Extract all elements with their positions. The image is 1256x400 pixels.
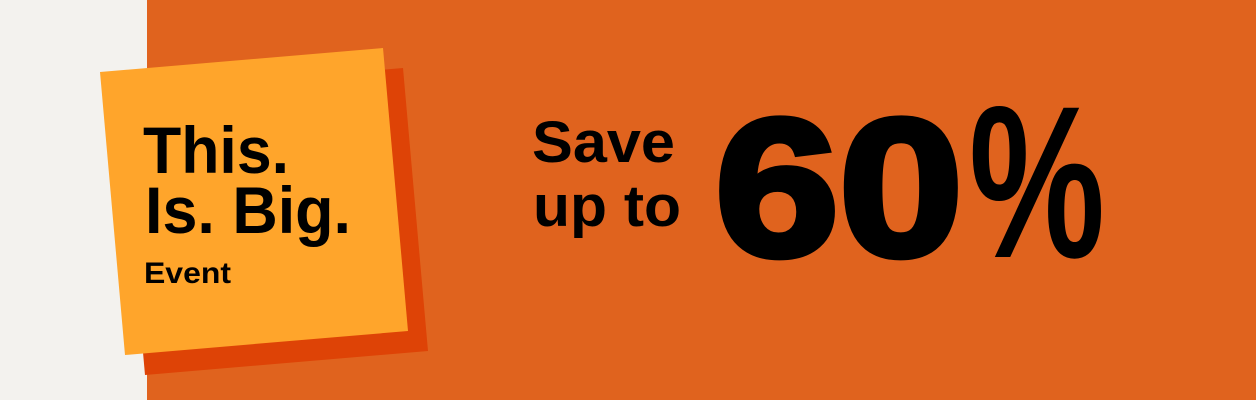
event label: Event [144,257,231,290]
savings offer [532,61,1105,303]
title line 2: Is. Big. [145,173,351,247]
save up to text [532,110,681,239]
60 figure: 60 [715,79,963,297]
event title [143,113,351,290]
red shadow square [120,68,428,375]
save up to text: Save [532,110,675,175]
title line 1: This. [143,113,289,187]
save up to text: up to [533,174,681,239]
percent sign: % [969,61,1105,303]
yellow tilted card [100,48,408,355]
